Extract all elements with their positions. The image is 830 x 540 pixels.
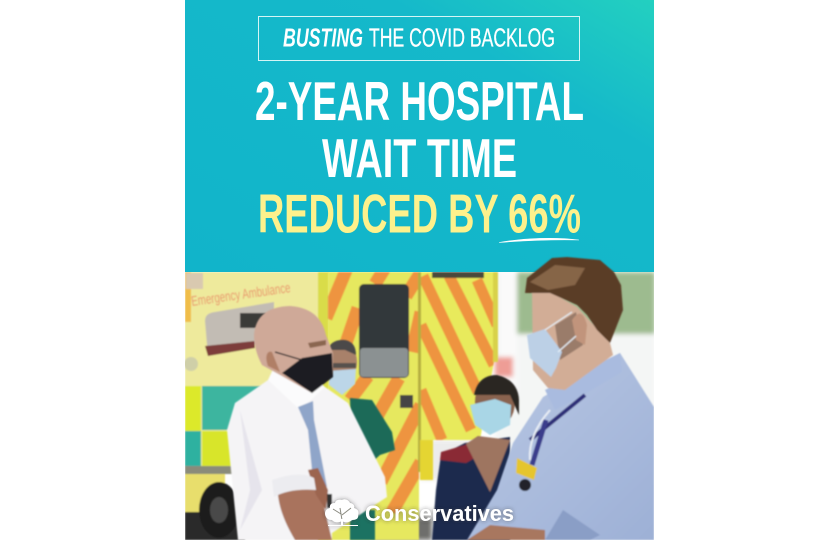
logo: Conservatives: [325, 499, 514, 526]
blue surgical mask: [527, 329, 562, 377]
panel: teal headline banner: [185, 0, 654, 272]
man in white shirt and black mask: [227, 306, 387, 540]
tag box: busting the covid backlog: [258, 16, 580, 60]
photo background: trees and white building: [372, 272, 655, 540]
headline line 2: WAIT TIME: [322, 127, 517, 189]
hand-drawn underline below 66%: [499, 238, 579, 242]
neck and face: [532, 293, 613, 390]
tag box: busting the covid backlog: BUSTING: [283, 22, 363, 52]
paramedic in green with blue mask: [327, 340, 395, 540]
photo: hospital staff in front of ambulance: [184, 257, 655, 540]
hair: [525, 257, 623, 343]
wordmark: Conservatives: [365, 501, 514, 526]
head: [254, 306, 333, 393]
tag box: busting the covid backlog: THE COVID BACKLOG: [369, 22, 555, 52]
headline line 3: reduced by 66%: REDUCED BY 66%: [258, 182, 581, 244]
ambulance side: [184, 272, 329, 540]
black mask: [282, 353, 333, 393]
arm: [278, 482, 332, 540]
tie: [298, 401, 327, 487]
ambulance rear doors with chevrons: [326, 268, 499, 540]
man with curly hair in blue shirt: [467, 257, 654, 540]
nurse in navy uniform: [432, 375, 519, 540]
headline line 1: 2-YEAR HOSPITAL: [255, 70, 584, 132]
ambulance window: [359, 284, 409, 378]
ambulance side: Emergency Ambulance: [190, 279, 292, 309]
icon: tree: [325, 499, 358, 526]
